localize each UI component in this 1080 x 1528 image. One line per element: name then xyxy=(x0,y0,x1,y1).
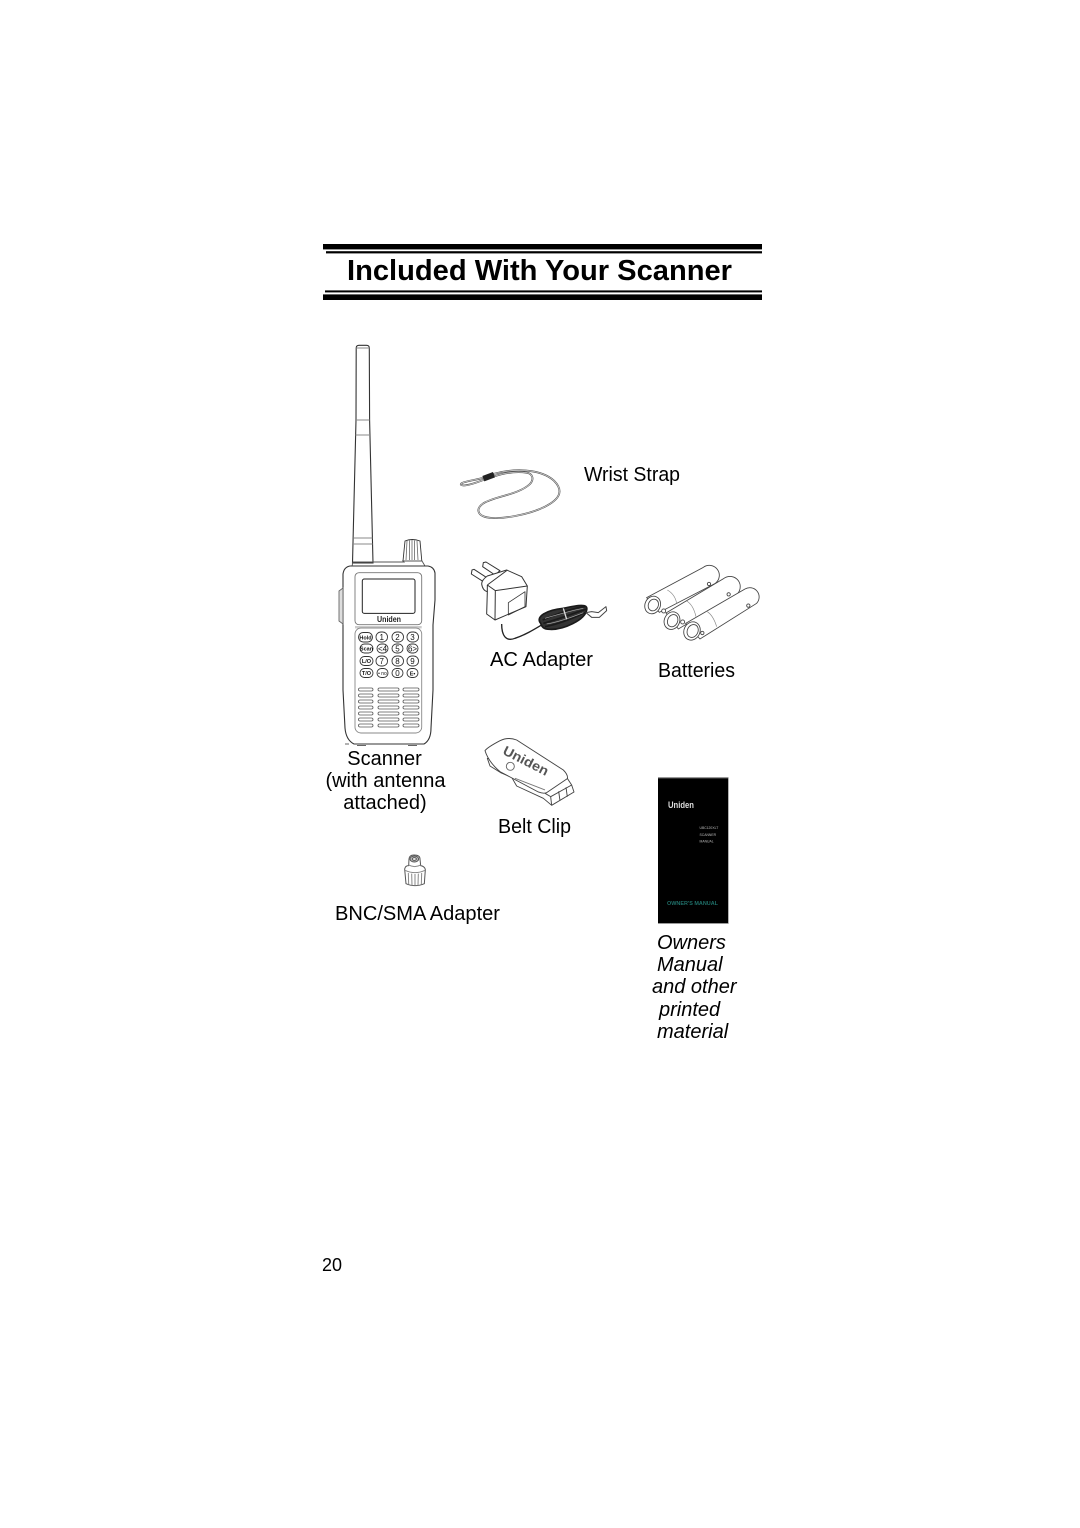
label: scanner: attached) xyxy=(343,792,427,814)
illustration: AC adapter xyxy=(471,562,607,639)
illustration: BNC/SMA adapter xyxy=(405,855,425,886)
label: scanner: (with antenna xyxy=(325,770,446,792)
label: owners manual and other printed material: and other xyxy=(652,976,738,998)
battery 2 xyxy=(661,576,740,632)
keypad: Scan xyxy=(360,646,374,652)
keypad: 1 xyxy=(379,633,384,642)
output jack xyxy=(586,607,607,617)
keypad xyxy=(358,632,418,678)
keypad: • no xyxy=(378,671,387,677)
clip cover xyxy=(485,738,567,793)
manual cover text: MANUAL xyxy=(700,840,714,844)
label: scanner xyxy=(325,748,446,814)
keypad: L/O xyxy=(362,659,372,665)
clip base xyxy=(487,758,574,805)
manual cover text: UBC120XLT xyxy=(700,826,718,830)
keypad: E• xyxy=(410,672,415,678)
keypad: <4 xyxy=(378,644,388,654)
label: scanner: Scanner xyxy=(347,748,422,770)
illustration: wrist strap xyxy=(461,470,560,518)
volume knob xyxy=(403,540,422,561)
keypad: 5 xyxy=(395,644,400,654)
illustration: scanner xyxy=(339,345,435,746)
cable xyxy=(502,624,542,639)
heading band with title xyxy=(323,244,762,300)
label: batteries: Batteries xyxy=(658,660,735,682)
title: Included With Your Scanner xyxy=(347,255,732,287)
plug prongs xyxy=(471,569,489,583)
manual logo: Uniden xyxy=(668,800,694,810)
label: owners manual and other printed material: Manual xyxy=(657,954,723,976)
radio body xyxy=(339,561,435,746)
manual footer: OWNER'S MANUAL xyxy=(667,901,718,907)
speaker grille xyxy=(355,628,422,733)
label: owners manual and other printed material: printed xyxy=(658,999,721,1021)
label: belt clip: Belt Clip xyxy=(498,816,571,838)
label: owners manual and other printed material: Owners xyxy=(657,932,726,954)
label: BNC/SMA adapter: BNC/SMA Adapter xyxy=(335,903,500,925)
embossed logo: Uniden xyxy=(501,743,551,779)
keypad: 3 xyxy=(410,633,415,642)
battery 1 xyxy=(642,565,719,616)
label: AC adapter: AC Adapter xyxy=(490,649,593,671)
manual cover text xyxy=(700,826,718,844)
label: owners manual and other printed material xyxy=(652,932,738,1043)
cable coil xyxy=(539,605,587,629)
label: owners manual and other printed material: material xyxy=(657,1021,729,1043)
illustration: batteries xyxy=(642,565,759,643)
keypad: 6> xyxy=(408,644,417,654)
adapter housing xyxy=(482,570,527,620)
illustration: belt clip xyxy=(485,738,574,805)
Uniden logo: Uniden xyxy=(377,615,401,624)
keypad: 7 xyxy=(379,657,384,666)
keypad: Hold xyxy=(359,636,372,642)
manual cover text: SCANNER xyxy=(700,833,717,837)
keypad: 8 xyxy=(395,657,400,666)
keypad: 9 xyxy=(410,657,415,666)
battery 3 xyxy=(681,588,759,643)
keypad: 2 xyxy=(395,633,400,642)
label: wrist strap: Wrist Strap xyxy=(584,464,680,486)
illustration: owner's manual xyxy=(658,777,728,924)
antenna xyxy=(352,345,373,563)
page number: 20 xyxy=(322,1255,342,1275)
keypad: 0 xyxy=(395,669,400,678)
display panel xyxy=(355,573,422,628)
keypad: T/O xyxy=(362,671,372,677)
